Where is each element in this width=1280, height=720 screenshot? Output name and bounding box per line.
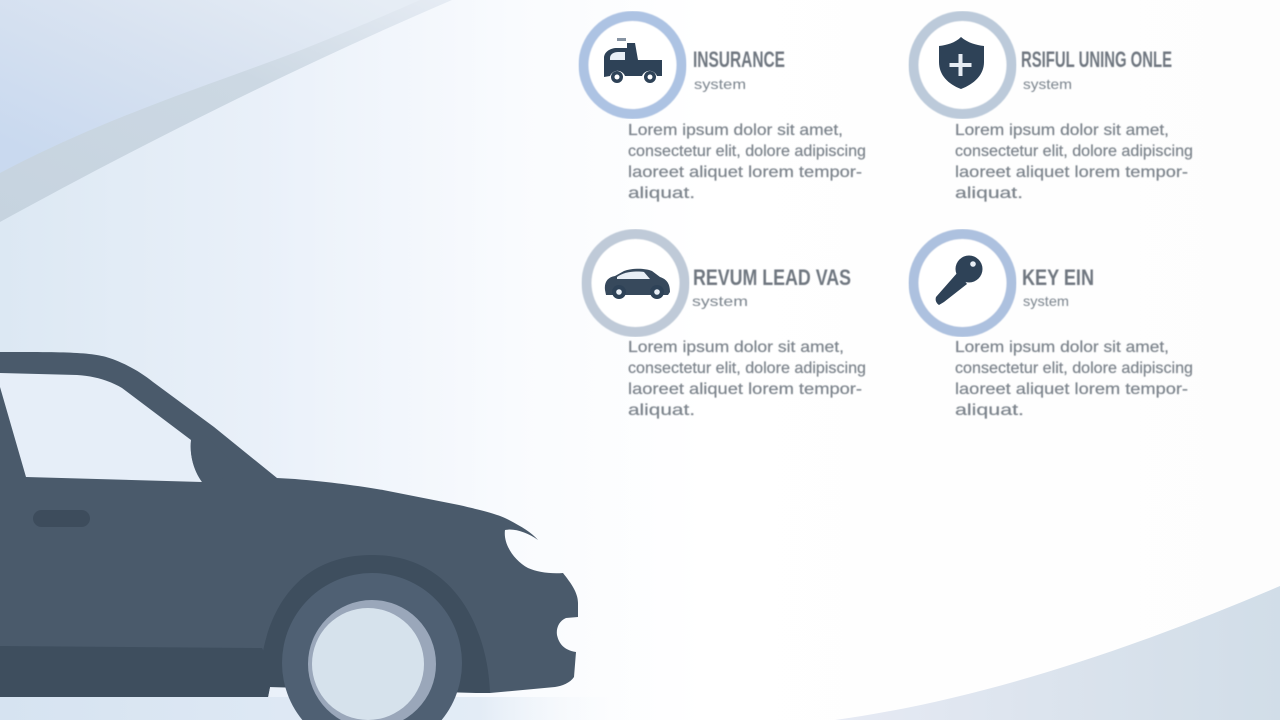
- heading: RSIFUL UNING ONLE: [1021, 47, 1172, 72]
- top-left swoosh: [0, 0, 452, 222]
- lower sill: [0, 646, 270, 697]
- body text: aliquat.: [628, 185, 695, 202]
- icon: car: [586, 234, 684, 332]
- wheel arch: [260, 555, 490, 693]
- bottom-right wave: [835, 586, 1280, 720]
- body text: Lorem ipsum dolor sit amet,: [955, 339, 1169, 356]
- subheading: system: [692, 293, 748, 309]
- body text: laoreet aliquet lorem tempor-: [628, 381, 862, 398]
- body text: [955, 339, 1193, 419]
- body text: aliquat.: [955, 402, 1024, 419]
- body text: consectetur elit, dolore adipiscing: [628, 143, 866, 160]
- body text: laoreet aliquet lorem tempor-: [955, 381, 1188, 398]
- door handle: [33, 510, 90, 527]
- body text: [628, 122, 866, 202]
- car body: [0, 352, 578, 697]
- panel: vehicle: [586, 234, 866, 419]
- floor strip: [0, 697, 640, 720]
- body text: Lorem ipsum dolor sit amet,: [628, 122, 843, 139]
- body text: aliquat.: [628, 402, 695, 419]
- body text: aliquat.: [955, 185, 1023, 202]
- panel: key: [914, 234, 1193, 419]
- body text: laoreet aliquet lorem tempor-: [628, 164, 862, 181]
- body text: [955, 122, 1193, 202]
- icon: key: [914, 234, 1012, 332]
- side window: [0, 373, 202, 482]
- body text: Lorem ipsum dolor sit amet,: [628, 339, 844, 356]
- body text: consectetur elit, dolore adipiscing: [955, 143, 1193, 160]
- panel: insurance: [584, 16, 866, 202]
- front wheel: [282, 573, 462, 720]
- panel: shield: [914, 16, 1193, 202]
- heading: INSURANCE: [693, 47, 785, 72]
- subheading: system: [1023, 293, 1069, 309]
- mirror: [191, 435, 240, 482]
- subheading: system: [694, 76, 746, 92]
- subheading: system: [1023, 76, 1072, 92]
- body text: consectetur elit, dolore adipiscing: [955, 360, 1193, 377]
- car illustration: [0, 352, 578, 720]
- heading: KEY EIN: [1022, 265, 1094, 290]
- body text: Lorem ipsum dolor sit amet,: [955, 122, 1169, 139]
- body text: [628, 339, 866, 419]
- icon: truck: [584, 16, 682, 114]
- body text: laoreet aliquet lorem tempor-: [955, 164, 1188, 181]
- icon: shield: [914, 16, 1012, 114]
- heading: REVUM LEAD VAS: [693, 265, 851, 290]
- body text: consectetur elit, dolore adipiscing: [628, 360, 866, 377]
